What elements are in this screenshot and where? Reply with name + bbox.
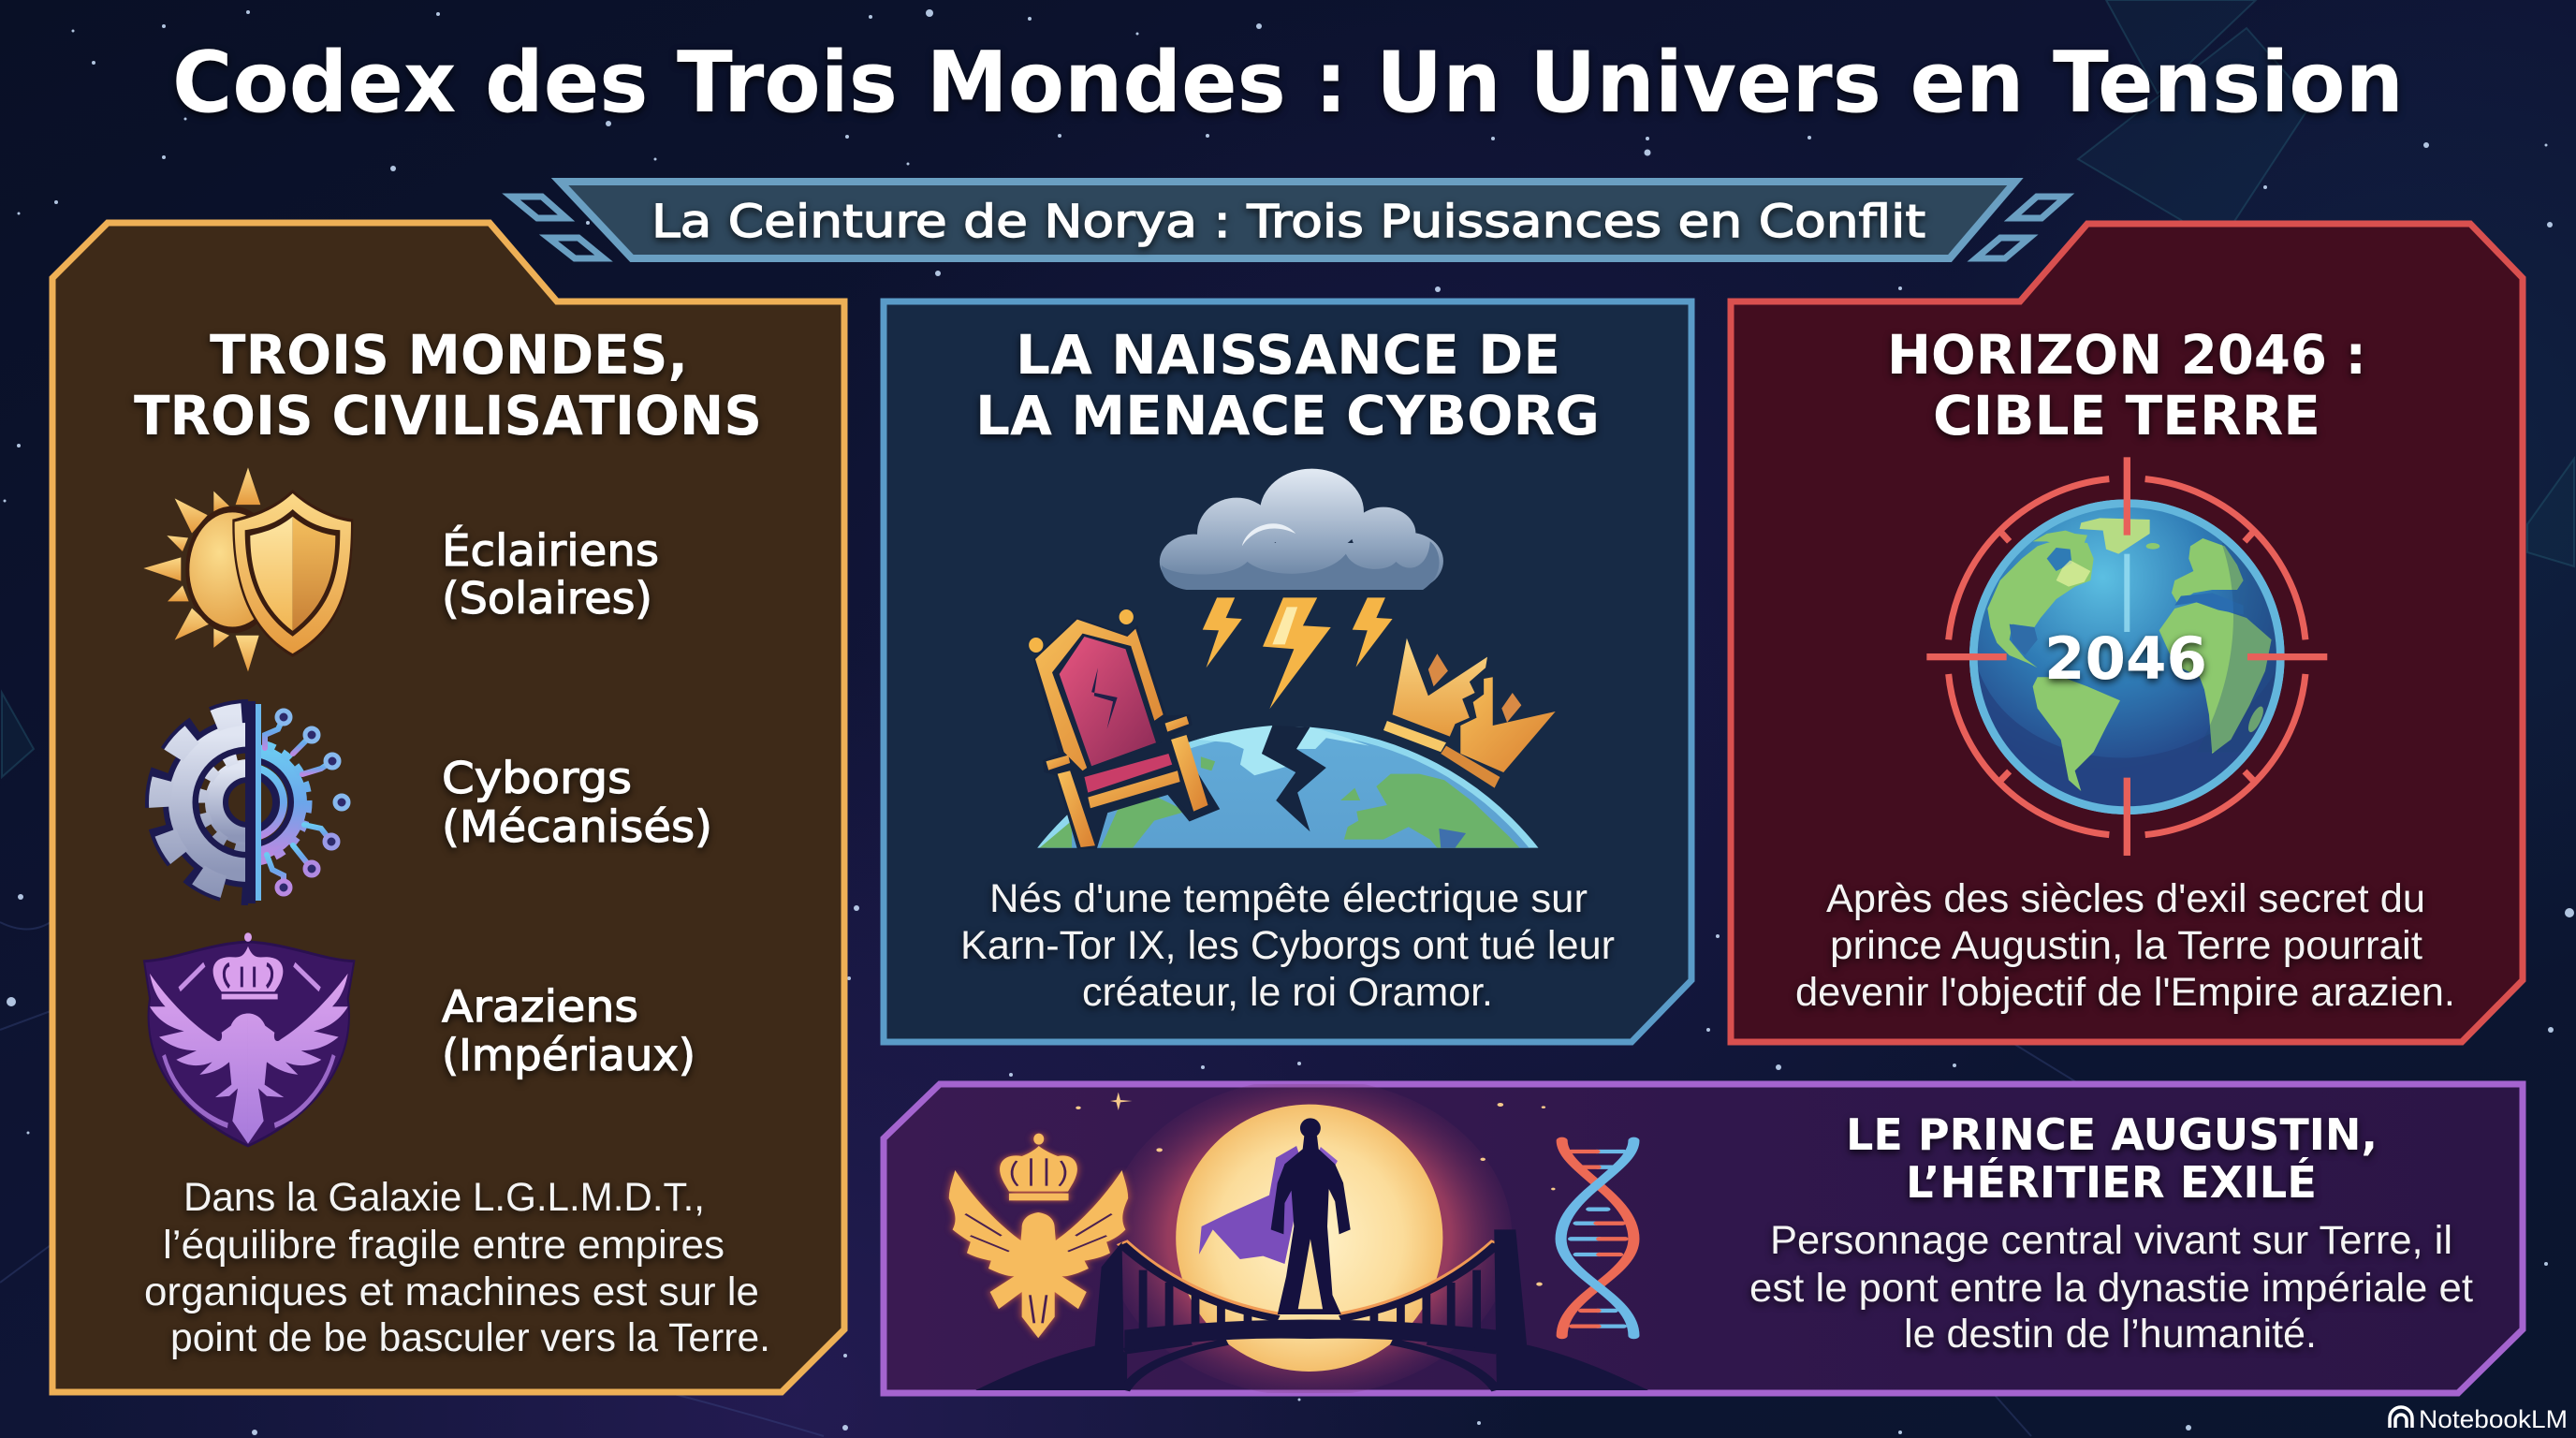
cloud	[1160, 469, 1443, 590]
text: horizon description	[1795, 876, 2455, 1015]
panel: trois mondes, trois civilisations	[52, 223, 844, 1392]
text: horizon description: prince Augustin, la Terre pourrait	[1830, 923, 2422, 968]
tilted throne	[1029, 609, 1217, 847]
faction labels: Éclairiens	[442, 525, 659, 576]
faction labels	[442, 525, 712, 1080]
text: galaxie description: l’équilibre fragile entre empires	[163, 1223, 724, 1268]
text: cyborg origin: Karn-Tor IX, les Cyborgs ont tué leur	[960, 923, 1615, 968]
gold eagle crest	[949, 1134, 1128, 1338]
panel: horizon 2046	[1731, 224, 2523, 1042]
banner: subtitle ribbon	[511, 182, 2066, 258]
heading: trois civilisations: TROIS CIVILISATIONS	[134, 384, 762, 448]
text: galaxie description	[144, 1175, 770, 1360]
cape	[1199, 1146, 1304, 1264]
text: cyborg origin: créateur, le roi Oramor.	[1082, 970, 1493, 1015]
faction labels: (Impériaux)	[442, 1030, 695, 1080]
panel: le prince augustin	[884, 1078, 2523, 1397]
text: galaxie description: organiques et machines est sur le	[144, 1269, 759, 1314]
title: Codex des Trois Mondes : Un Univers en Tension	[172, 34, 2404, 132]
moon and halo	[1106, 1078, 1512, 1397]
heading: menace cyborg	[975, 323, 1600, 448]
heading: menace cyborg: LA NAISSANCE DE	[1016, 323, 1560, 387]
text: prince description	[1749, 1218, 2473, 1357]
text: prince description: Personnage central vivant sur Terre, il	[1770, 1218, 2452, 1263]
heading: prince augustin: L’HÉRITIER EXILÉ	[1906, 1157, 2317, 1208]
banner decorations	[511, 197, 2066, 258]
dna helix	[1561, 1140, 1633, 1336]
text: horizon description: devenir l'objectif de l'Empire arazien.	[1795, 970, 2455, 1015]
small stars	[1076, 1093, 1556, 1286]
icon: cyborg gear and circuits	[160, 701, 348, 903]
text: cyborg origin	[960, 876, 1615, 1015]
heading: prince augustin	[1846, 1109, 2378, 1208]
text: prince description: est le pont entre la dynastie impériale et	[1749, 1266, 2473, 1311]
faction labels: Araziens	[442, 981, 638, 1032]
faction labels: (Mécanisés)	[442, 801, 712, 852]
logo: NotebookLM: NotebookLM	[2419, 1405, 2568, 1433]
illustration: prince on bridge	[949, 1078, 1648, 1397]
icon: sun and shield	[143, 467, 351, 672]
lightning bolts	[1203, 597, 1393, 709]
heading: horizon 2046: CIBLE TERRE	[1933, 384, 2320, 448]
broken crown	[1383, 638, 1556, 788]
faction labels: (Solaires)	[442, 573, 652, 624]
text: prince description: le destin de l’humanité.	[1904, 1312, 2317, 1357]
heading: trois civilisations	[134, 323, 762, 448]
heading: trois civilisations: TROIS MONDES,	[210, 323, 688, 387]
text: cyborg origin: Nés d'une tempête électrique sur	[989, 876, 1588, 921]
panel: la naissance de la menace cyborg	[880, 298, 1694, 1045]
subtitle: La Ceinture de Norya : Trois Puissances en Conflit	[651, 196, 1925, 248]
faction labels: Cyborgs	[442, 753, 632, 803]
heading: horizon 2046: HORIZON 2046 :	[1887, 323, 2366, 387]
text: horizon description: Après des siècles d'exil secret du	[1826, 876, 2425, 921]
prince silhouette	[1271, 1118, 1351, 1314]
heading: horizon 2046	[1887, 323, 2366, 448]
heading: menace cyborg: LA MENACE CYBORG	[975, 384, 1600, 448]
cracked earth	[1037, 726, 1539, 848]
icon: arazien eagle crest	[144, 932, 354, 1146]
label: 2046: 2046	[2044, 624, 2207, 693]
text: galaxie description: point de be basculer vers la Terre.	[170, 1315, 770, 1360]
bridge	[975, 1229, 1648, 1390]
heading: prince augustin: LE PRINCE AUGUSTIN,	[1846, 1109, 2378, 1160]
text: galaxie description: Dans la Galaxie L.G.L.M.D.T.,	[183, 1175, 705, 1220]
illustration: storm, broken throne, crown and earth	[1029, 468, 1556, 848]
illustration: earth in target reticle	[1926, 457, 2327, 856]
